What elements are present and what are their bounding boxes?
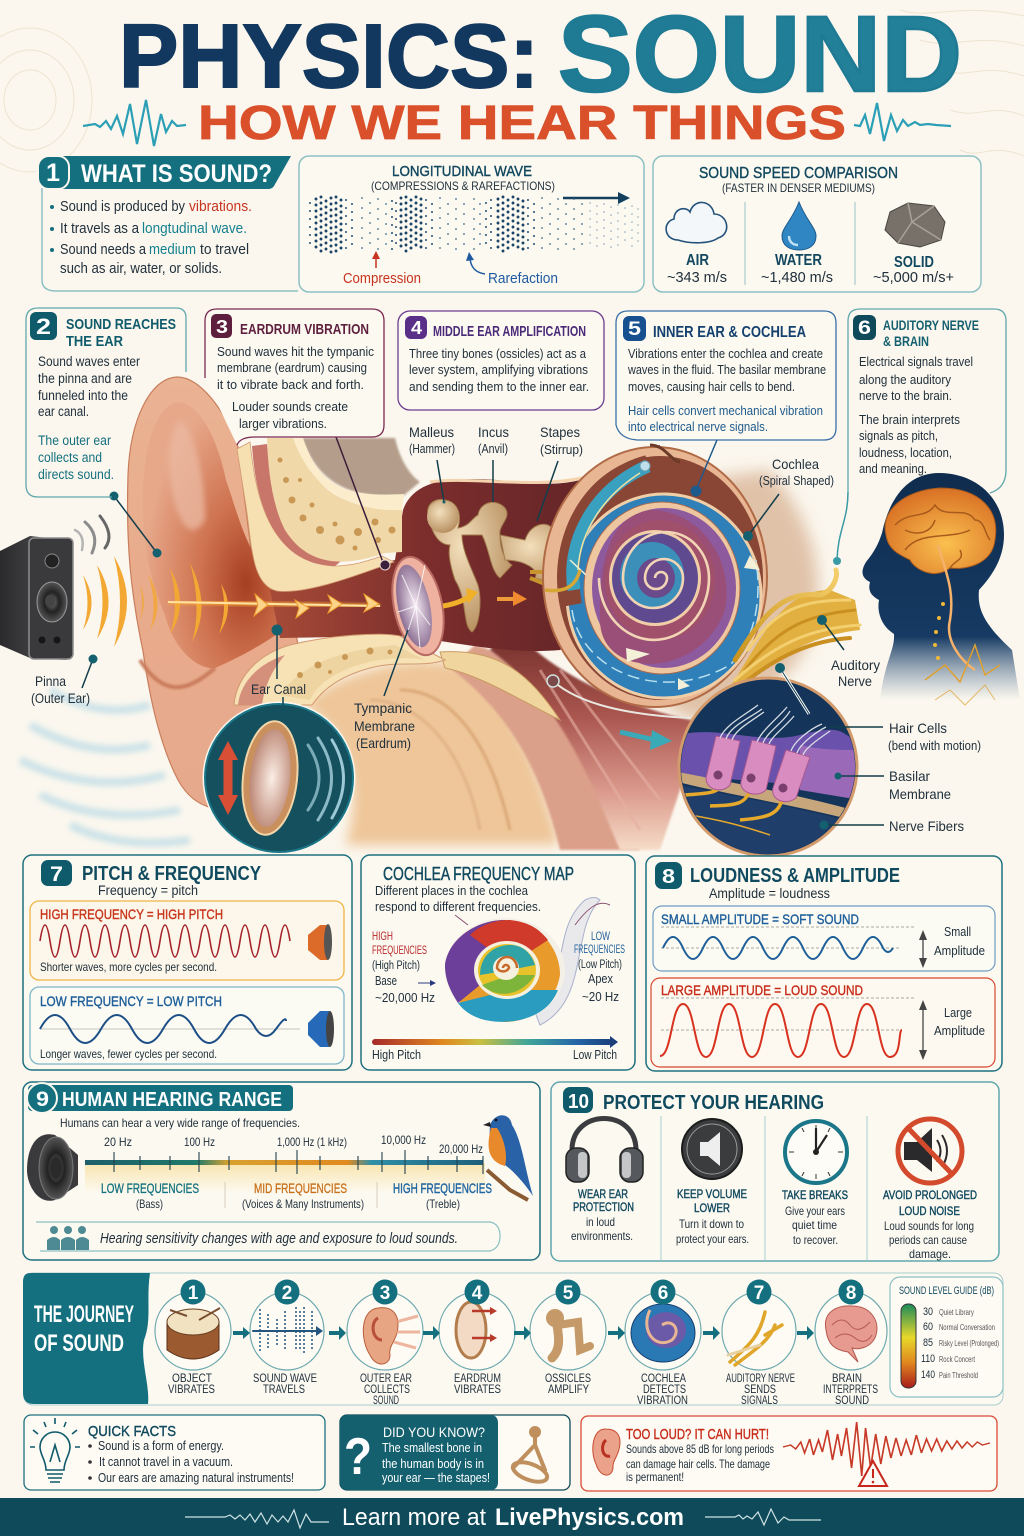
callout: middle ear amplification: and sending them to the inner ear. bbox=[409, 379, 589, 394]
callout: eardrum vibration bbox=[205, 309, 384, 445]
panel: longitudinal wave: (COMPRESSIONS & RAREFACTIONS) bbox=[371, 179, 555, 193]
anatomy labels: Nerve bbox=[838, 673, 872, 689]
panel: quick facts: Our ears are amazing natural instruments! bbox=[98, 1471, 294, 1485]
anatomy labels: (Spiral Shaped) bbox=[759, 474, 834, 488]
step labels: INTERPRETS bbox=[823, 1384, 878, 1396]
callout: inner ear and cochlea: 5 bbox=[628, 319, 642, 340]
step numbers: 6 bbox=[658, 1283, 668, 1304]
text: compression label bbox=[343, 251, 421, 287]
chart: hearing range scale: (Bass) bbox=[136, 1197, 163, 1211]
callout: auditory nerve and brain: signals as pitch, bbox=[859, 428, 938, 443]
text: ear protection tips: WEAR EAR bbox=[578, 1187, 628, 1201]
text: sound bullets: vibrations. bbox=[189, 198, 252, 215]
text: sound bullets: Sound is produced by bbox=[60, 198, 185, 215]
text: rarefaction label bbox=[466, 252, 558, 287]
text: high frequencies: (High Pitch) bbox=[372, 960, 420, 972]
panel: too loud warning bbox=[581, 1416, 997, 1491]
text: low frequencies: LOW bbox=[591, 931, 610, 943]
sub-panel: large amplitude: Amplitude bbox=[934, 1023, 985, 1038]
callout: auditory nerve and brain: nerve to the brain. bbox=[859, 388, 952, 403]
step numbers: 8 bbox=[846, 1283, 856, 1304]
text: high frequencies: HIGH bbox=[372, 929, 393, 943]
icon: brain bbox=[825, 1306, 877, 1362]
chart: loud waveform bbox=[783, 1422, 990, 1476]
sub-panel: low frequency: LOW FREQUENCY = LOW PITCH bbox=[40, 993, 222, 1009]
callout: eardrum vibration: Louder sounds create bbox=[232, 399, 348, 414]
text: ear protection tips: AVOID PROLONGED bbox=[883, 1188, 977, 1202]
text: ear protection tips: TAKE BREAKS bbox=[782, 1188, 848, 1202]
panel: cochlea frequency map bbox=[361, 855, 635, 1070]
sub-panel: large amplitude: LARGE AMPLITUDE = LOUD SOUND bbox=[661, 982, 863, 998]
callout: sound reaches the ear: collects and bbox=[38, 450, 102, 465]
anatomy labels: Incus bbox=[478, 424, 509, 440]
text: high frequencies: Base bbox=[375, 973, 397, 988]
anatomy labels: Membrane bbox=[889, 786, 951, 802]
step labels: EARDRUM bbox=[454, 1373, 501, 1385]
icon: people bbox=[47, 1226, 89, 1250]
chart: rainbow spiral bbox=[445, 898, 610, 1025]
icon: stapes bone bbox=[510, 1426, 550, 1486]
heading: what is sound: WHAT IS SOUND? bbox=[81, 160, 272, 188]
panel: sound speed comparison: ~5,000 m/s+ bbox=[873, 269, 954, 286]
anatomy labels: (bend with motion) bbox=[888, 739, 981, 753]
arrow: teal fluid bbox=[620, 730, 672, 750]
callout: middle ear amplification: lever system, amplifying vibrations bbox=[409, 362, 588, 377]
icon: drum bbox=[167, 1308, 220, 1359]
step labels: COCHLEA bbox=[641, 1373, 686, 1385]
step numbers bbox=[188, 1283, 856, 1304]
panel: cochlea frequency map: Different places in the cochlea bbox=[375, 883, 529, 898]
step labels: COLLECTS bbox=[364, 1384, 410, 1396]
callout: inner ear and cochlea: Vibrations enter the cochlea and create bbox=[628, 347, 823, 361]
sub-panel: low frequency bbox=[30, 987, 344, 1064]
callout: sound reaches the ear: THE EAR bbox=[66, 333, 123, 350]
panel: sound speed comparison bbox=[653, 156, 981, 292]
panel: sound speed comparison: (FASTER IN DENSER MEDIUMS) bbox=[722, 181, 875, 195]
text: ear protection tips: protect your ears. bbox=[676, 1232, 749, 1246]
sub-panel: low frequency: Longer waves, fewer cycles per second. bbox=[40, 1047, 217, 1061]
step labels: OBJECT bbox=[172, 1373, 212, 1385]
anatomy labels: Basilar bbox=[889, 768, 930, 784]
text: sound bullets: longtudinal wave. bbox=[142, 220, 247, 237]
bar: pitch scale: Low Pitch bbox=[573, 1048, 617, 1062]
panel: sound level guide: 30 bbox=[923, 1306, 933, 1318]
heading: human hearing range bbox=[27, 1083, 293, 1113]
text: low frequencies: Apex bbox=[588, 971, 613, 986]
heading: what is sound: 1 bbox=[46, 159, 60, 187]
sub-panel: small amplitude bbox=[653, 906, 995, 971]
panel: did you know: ? bbox=[344, 1428, 372, 1486]
anatomy labels: Ear Canal bbox=[251, 681, 306, 697]
text: low frequencies: FREQUENCIES bbox=[574, 944, 625, 956]
callout: eardrum vibration: membrane (eardrum) causing bbox=[217, 360, 367, 375]
pinna: outer ear bbox=[128, 377, 300, 808]
icon: range speaker bbox=[27, 1134, 78, 1201]
callout: sound reaches the ear: 2 bbox=[36, 314, 51, 339]
anatomy labels: Nerve Fibers bbox=[889, 818, 964, 834]
callout: sound reaches the ear: the pinna and are bbox=[38, 371, 132, 386]
chart: hearing range scale: (Voices & Many Instruments) bbox=[242, 1197, 364, 1211]
callout: middle ear amplification bbox=[398, 311, 604, 410]
cavity: ear canal and middle ear bbox=[270, 445, 660, 651]
footer: Learn more at bbox=[342, 1504, 486, 1531]
anatomy labels: Malleus bbox=[409, 424, 454, 440]
callout: auditory nerve and brain: The brain interprets bbox=[859, 412, 960, 427]
panel: pitch and frequency: PITCH & FREQUENCY bbox=[82, 863, 262, 885]
heading: journey: OF SOUND bbox=[34, 1330, 124, 1357]
step numbers: 1 bbox=[188, 1283, 199, 1304]
bar: pitch scale: High Pitch bbox=[372, 1048, 421, 1062]
eardrum: tympanic membrane bbox=[384, 552, 452, 660]
text: sound bullets: to travel bbox=[200, 241, 249, 258]
step numbers: 3 bbox=[380, 1283, 390, 1304]
icon: water drop bbox=[782, 202, 816, 250]
auditory nerve bundle bbox=[720, 570, 860, 700]
step circles bbox=[155, 1292, 887, 1370]
icon: cloud bbox=[666, 202, 727, 243]
anatomy labels bbox=[31, 424, 981, 834]
anatomy labels: (Eardrum) bbox=[356, 735, 411, 751]
callout: inner ear and cochlea: waves in the fluid. The basilar membrane bbox=[627, 363, 826, 377]
heading: journey: THE JOURNEY bbox=[34, 1301, 134, 1328]
text: low frequencies bbox=[574, 931, 625, 1004]
icon: warning triangle bbox=[859, 1461, 887, 1486]
callout: inner ear and cochlea: Hair cells convert mechanical vibration bbox=[628, 404, 823, 418]
callout: hearing sensitivity: Hearing sensitivity changes with age and exposure to loud sounds. bbox=[100, 1231, 458, 1247]
arrow: sound energy through canal bbox=[168, 594, 380, 618]
ossicles: malleus incus stapes bbox=[427, 499, 575, 632]
step badges bbox=[180, 1280, 864, 1304]
decorative contour lines bbox=[0, 10, 1024, 172]
panel: sound speed comparison: ~1,480 m/s bbox=[761, 269, 833, 286]
pale sound ripples bbox=[20, 690, 190, 843]
chart: hearing range scale: (Treble) bbox=[426, 1197, 460, 1211]
step labels: BRAIN bbox=[832, 1373, 862, 1385]
panel: loudness and amplitude bbox=[646, 856, 1002, 1071]
panel: loudness and amplitude: 8 bbox=[662, 866, 675, 888]
anatomy labels: (Stirrup) bbox=[540, 443, 583, 457]
inset: hair cells bbox=[678, 678, 860, 860]
panel: sound speed comparison: WATER bbox=[775, 252, 822, 269]
title: PHYSICS: bbox=[119, 7, 539, 107]
icon: sound wave dots bbox=[253, 1308, 323, 1354]
icon: outer ear bbox=[363, 1308, 420, 1364]
panel: pitch and frequency: Frequency = pitch bbox=[98, 883, 198, 898]
chart: hearing range scale: 20 Hz bbox=[104, 1135, 132, 1149]
sub-panel: small amplitude: Small bbox=[944, 924, 971, 939]
anatomy labels: (Hammer) bbox=[409, 442, 455, 456]
callout: sound reaches the ear: Sound waves enter bbox=[38, 354, 140, 369]
panel: longitudinal wave: LONGITUDINAL WAVE bbox=[392, 163, 532, 180]
icon: light bulb bbox=[30, 1418, 80, 1482]
text: ear protection tips: damage. bbox=[909, 1247, 951, 1261]
text: sound bullets: medium bbox=[149, 241, 196, 258]
callout: auditory nerve and brain: Electrical signals travel bbox=[859, 354, 973, 369]
panel: did you know bbox=[340, 1415, 570, 1490]
icon: no loud noise bbox=[898, 1119, 962, 1183]
panel: cochlea frequency map: respond to different frequencies. bbox=[375, 899, 541, 914]
callout: auditory nerve and brain: AUDITORY NERVE bbox=[883, 317, 979, 333]
panel: loudness and amplitude: LOUDNESS & AMPLITUDE bbox=[690, 865, 900, 887]
panel: loudness and amplitude: Amplitude = loudness bbox=[709, 886, 830, 901]
text: ear protection tips: periods can cause bbox=[889, 1233, 967, 1247]
callout: auditory nerve and brain: 6 bbox=[858, 318, 871, 339]
panel: human hearing range bbox=[23, 1082, 540, 1260]
sub-panel: small amplitude: SMALL AMPLITUDE = SOFT SOUND bbox=[661, 911, 859, 927]
callout: inner ear and cochlea bbox=[616, 311, 836, 440]
panel: what is sound bbox=[38, 156, 298, 291]
step labels: OSSICLES bbox=[545, 1373, 591, 1385]
bone: lower canal wall bbox=[234, 634, 445, 705]
step labels: AMPLIFY bbox=[548, 1384, 589, 1396]
bar: pitch scale bbox=[372, 1036, 618, 1062]
anatomy labels: Hair Cells bbox=[889, 720, 947, 736]
callout: sound reaches the ear: funneled into the bbox=[38, 388, 128, 403]
icon: headphones bbox=[566, 1118, 643, 1182]
callout: eardrum vibration: EARDRUM VIBRATION bbox=[240, 321, 369, 338]
panel: too loud warning: can damage hair cells. The damage bbox=[626, 1457, 770, 1471]
callout: sound reaches the ear bbox=[26, 308, 186, 497]
panel: sound level guide: 110 bbox=[921, 1353, 935, 1365]
title: HOW WE HEAR THINGS bbox=[198, 97, 846, 150]
panel: sound level guide: Normal Conversation bbox=[939, 1322, 995, 1332]
sub-panel: high frequency: HIGH FREQUENCY = HIGH PITCH bbox=[40, 906, 223, 922]
text: low frequencies: (Low Pitch) bbox=[578, 959, 622, 971]
panel: protect your hearing bbox=[551, 1082, 999, 1261]
cochlea: spiral bbox=[543, 445, 767, 707]
text: ear protection tips: KEEP VOLUME bbox=[677, 1187, 747, 1201]
sound arcs and arrows in canal bbox=[83, 556, 228, 647]
title bbox=[119, 0, 962, 150]
panel: the journey of sound bbox=[23, 1273, 1003, 1407]
step numbers: 2 bbox=[282, 1283, 292, 1304]
text: sound bullets: Sound needs a bbox=[60, 241, 147, 258]
panel: sound level guide: 60 bbox=[923, 1321, 933, 1333]
panel: cochlea frequency map: COCHLEA FREQUENCY MAP bbox=[383, 864, 574, 884]
heading: human hearing range: 9 bbox=[36, 1088, 49, 1111]
text: high frequencies: FREQUENCIES bbox=[372, 945, 427, 957]
panel: sound speed comparison: SOLID bbox=[894, 254, 934, 271]
panel: sound level guide bbox=[890, 1277, 1003, 1397]
icon: rock bbox=[885, 203, 945, 247]
panel: sound speed comparison: ~343 m/s bbox=[667, 269, 727, 286]
anatomy labels: (Outer Ear) bbox=[31, 690, 90, 706]
panel: quick facts bbox=[24, 1415, 325, 1490]
text: ear protection tips: PROTECTION bbox=[573, 1200, 634, 1214]
panel: sound level guide: 85 bbox=[923, 1337, 933, 1349]
sub-panel: high frequency: Shorter waves, more cycles per second. bbox=[40, 960, 217, 974]
panel: did you know: your ear — the stapes! bbox=[382, 1470, 490, 1485]
callout: middle ear amplification: 4 bbox=[411, 318, 422, 338]
step labels: VIBRATES bbox=[168, 1384, 215, 1396]
leader dots bbox=[88, 486, 842, 830]
sub-panel: large amplitude: Large bbox=[944, 1005, 972, 1020]
panel: sound speed comparison: AIR bbox=[686, 252, 709, 269]
callout: auditory nerve and brain bbox=[848, 309, 1006, 493]
chart: hearing range scale: HIGH FREQUENCIES bbox=[393, 1181, 492, 1196]
callout: sound reaches the ear: The outer ear bbox=[38, 433, 111, 448]
callout: inner ear and cochlea: into electrical nerve signals. bbox=[628, 420, 768, 434]
anatomy labels: Auditory bbox=[831, 657, 880, 673]
arrows between steps bbox=[233, 1326, 814, 1340]
panel: did you know: The smallest bone in bbox=[382, 1440, 482, 1455]
callout: eardrum vibration: it to vibrate back and forth. bbox=[217, 377, 364, 392]
callout: inner ear and cochlea: INNER EAR & COCHLEA bbox=[653, 324, 806, 341]
panel: human hearing range: Humans can hear a very wide range of frequencies. bbox=[60, 1116, 300, 1130]
callout: sound reaches the ear: directs sound. bbox=[38, 467, 114, 482]
backdrop: tissue behind cochlea bbox=[560, 470, 818, 720]
chart: hearing range scale: 10,000 Hz bbox=[381, 1133, 426, 1147]
bone: upper temporal bbox=[237, 438, 420, 591]
callout: auditory nerve and brain: and meaning. bbox=[859, 461, 927, 476]
callout: middle ear amplification: MIDDLE EAR AMPLIFICATION bbox=[433, 323, 586, 340]
panel: sound level guide: Pain Threshold bbox=[939, 1370, 978, 1380]
anatomy labels: Stapes bbox=[540, 424, 580, 440]
chart: hearing range scale: 1,000 Hz (1 kHz) bbox=[277, 1135, 347, 1149]
lower tissue bands bbox=[300, 625, 700, 850]
panel: too loud warning: TOO LOUD? IT CAN HURT! bbox=[626, 1426, 769, 1443]
panel: longitudinal wave bbox=[299, 156, 644, 292]
footer: LivePhysics.com bbox=[495, 1504, 684, 1531]
ossicle stirrup link bbox=[545, 570, 580, 591]
callout: inner ear and cochlea: moves, causing hair cells to bend. bbox=[628, 380, 795, 394]
panel: quick facts: Sound is a form of energy. bbox=[98, 1439, 224, 1453]
step numbers: 4 bbox=[472, 1283, 483, 1304]
text: sound bullets bbox=[50, 198, 252, 277]
icon: bluebird bbox=[483, 1115, 533, 1200]
footer bbox=[0, 1498, 1024, 1536]
text: ear protection tips: Give your ears bbox=[785, 1204, 845, 1218]
icon: nerve signals bbox=[728, 1312, 782, 1365]
step numbers: 7 bbox=[754, 1283, 764, 1304]
speaker gray arcs bbox=[75, 516, 109, 553]
step labels: OUTER EAR bbox=[360, 1373, 412, 1385]
callout: eardrum vibration: larger vibrations. bbox=[239, 416, 327, 431]
step labels: DETECTS bbox=[643, 1384, 686, 1396]
arrows: middle ear vibration bbox=[443, 588, 527, 606]
panel: did you know: DID YOU KNOW? bbox=[383, 1424, 485, 1440]
step labels: SENDS bbox=[744, 1384, 776, 1396]
panel: did you know: the human body is in bbox=[382, 1456, 484, 1471]
anatomy labels: Tympanic bbox=[354, 700, 412, 716]
step labels: VIBRATION bbox=[637, 1395, 688, 1407]
chart: hearing range scale bbox=[85, 1133, 492, 1211]
step labels: AUDITORY NERVE bbox=[726, 1373, 795, 1385]
panel: sound speed comparison: SOUND SPEED COMPARISON bbox=[699, 165, 898, 182]
icon: red ear bbox=[593, 1429, 620, 1475]
step labels: TRAVELS bbox=[263, 1384, 305, 1396]
chart: particle compression wave bbox=[310, 197, 638, 253]
text: rarefaction label: Rarefaction bbox=[488, 270, 558, 287]
arrow: wave direction bbox=[563, 192, 630, 204]
icon: clock bbox=[785, 1121, 847, 1183]
icon: ossicles bbox=[546, 1309, 590, 1358]
anatomy labels: (Anvil) bbox=[478, 442, 508, 456]
text: ear protection tips: to recover. bbox=[793, 1233, 838, 1247]
text: compression label: Compression bbox=[343, 270, 421, 287]
panel: pitch and frequency: 7 bbox=[50, 863, 63, 886]
panel: sound level guide: Rock Concert bbox=[939, 1354, 975, 1364]
step labels: SOUND bbox=[835, 1395, 869, 1407]
sub-panel: large amplitude bbox=[651, 978, 995, 1067]
callout: eardrum vibration: Sound waves hit the tympanic bbox=[217, 344, 374, 359]
text: ear protection tips: Turn it down to bbox=[679, 1217, 744, 1231]
icon: eardrum vibrates bbox=[456, 1302, 497, 1358]
anatomy labels: Cochlea bbox=[772, 456, 819, 472]
icon: title sound waves bbox=[83, 100, 951, 146]
anatomy labels: Membrane bbox=[354, 718, 415, 734]
callout: auditory nerve and brain: & BRAIN bbox=[883, 333, 929, 349]
step labels: VIBRATES bbox=[454, 1384, 501, 1396]
text: high frequencies bbox=[372, 929, 436, 1005]
panel: too loud warning: Sounds above 85 dB for long periods bbox=[626, 1442, 774, 1456]
text: ear protection tips: in loud bbox=[586, 1215, 615, 1229]
sub-panel: high frequency bbox=[30, 901, 344, 980]
callout: auditory nerve and brain: along the auditory bbox=[859, 372, 951, 387]
leader lines and dots bbox=[82, 437, 884, 825]
panel: quick facts: It cannot travel in a vacuum. bbox=[99, 1455, 233, 1469]
panel: pitch and frequency bbox=[23, 855, 352, 1070]
icon: footer waves bbox=[185, 1509, 821, 1528]
panel: protect your hearing: PROTECT YOUR HEARING bbox=[603, 1092, 824, 1114]
step labels: SOUND bbox=[373, 1395, 399, 1407]
panel: sound level guide: 140 bbox=[921, 1369, 935, 1381]
callout: eardrum vibration: 3 bbox=[216, 317, 228, 337]
text: sound bullets: It travels as a bbox=[60, 220, 140, 237]
text: ear protection tips: quiet time bbox=[792, 1218, 837, 1232]
step numbers: 5 bbox=[563, 1283, 574, 1304]
text: ear protection tips: environments. bbox=[571, 1229, 633, 1243]
inset: eardrum vibration bbox=[204, 703, 354, 853]
chart: hearing range scale: LOW FREQUENCIES bbox=[101, 1181, 199, 1196]
step labels bbox=[168, 1373, 878, 1407]
callout: auditory nerve and brain: loudness, location, bbox=[859, 445, 952, 460]
chart: hearing range scale: MID FREQUENCIES bbox=[254, 1181, 347, 1196]
heading: human hearing range: HUMAN HEARING RANGE bbox=[62, 1089, 282, 1111]
chart: hearing range scale: 20,000 Hz bbox=[439, 1142, 483, 1156]
illustration: ear anatomy bbox=[0, 377, 1020, 860]
callout: middle ear amplification: Three tiny bones (ossicles) act as a bbox=[409, 346, 587, 361]
icon: volume lower bbox=[682, 1119, 742, 1179]
step labels: SOUND WAVE bbox=[253, 1373, 317, 1385]
heading: journey bbox=[23, 1273, 150, 1404]
text: ear protection tips: Loud sounds for long bbox=[884, 1219, 974, 1233]
panel: protect your hearing: 10 bbox=[568, 1091, 589, 1113]
panel: sound level guide: Quiet Library bbox=[939, 1307, 975, 1317]
text: ear protection tips: LOUD NOISE bbox=[899, 1204, 960, 1218]
head and brain bbox=[863, 473, 1020, 705]
text: low frequencies: ~20 Hz bbox=[582, 989, 619, 1004]
text: ear protection tips bbox=[571, 1187, 977, 1261]
icon: speaker bbox=[0, 536, 73, 660]
text: sound bullets: such as air, water, or solids. bbox=[60, 260, 222, 277]
text: ear protection tips: LOWER bbox=[694, 1201, 730, 1215]
callout: hearing sensitivity bbox=[36, 1222, 500, 1251]
anatomy labels: Pinna bbox=[35, 673, 66, 689]
heading: what is sound bbox=[38, 156, 291, 189]
icon: cochlea mini bbox=[631, 1304, 695, 1362]
callout: sound reaches the ear: SOUND REACHES bbox=[66, 316, 176, 333]
panel: too loud warning: is permanent! bbox=[626, 1470, 684, 1484]
callout: sound reaches the ear: ear canal. bbox=[38, 404, 89, 419]
sub-panel: small amplitude: Amplitude bbox=[934, 943, 985, 958]
step labels: SIGNALS bbox=[741, 1395, 778, 1407]
text: high frequencies: ~20,000 Hz bbox=[375, 990, 435, 1005]
chart: hearing range scale: 100 Hz bbox=[184, 1135, 215, 1149]
panel: quick facts: QUICK FACTS bbox=[88, 1423, 176, 1440]
